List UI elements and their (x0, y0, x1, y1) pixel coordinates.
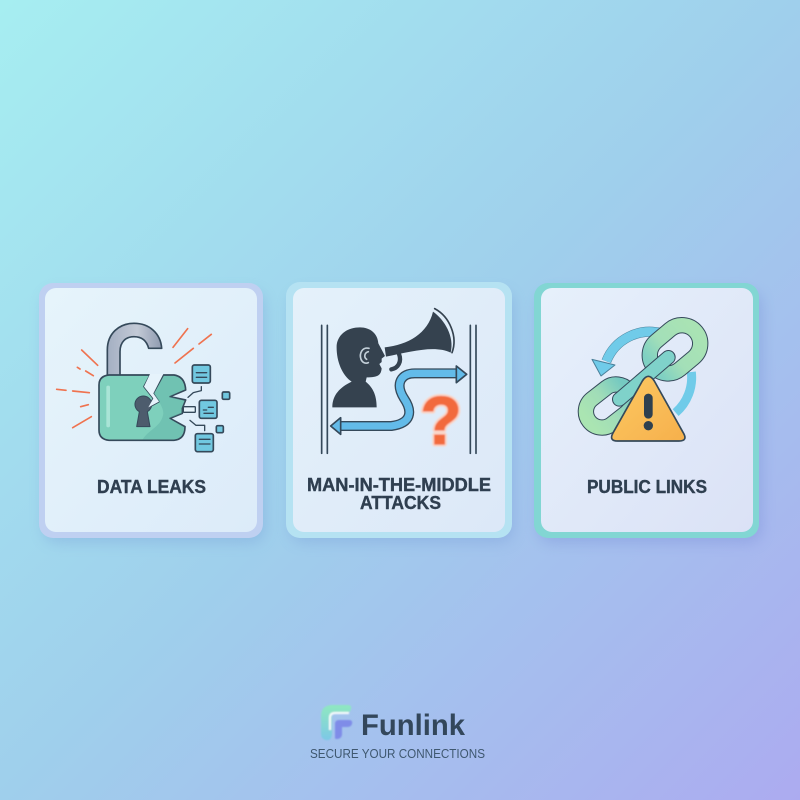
data fragment (183, 407, 195, 412)
panel: public links (534, 283, 762, 543)
rays (57, 329, 211, 428)
head silhouette (332, 327, 385, 407)
heading: man-in-the-middle attacks: MAN-IN-THE-MIDDLE (307, 475, 491, 495)
icon: eavesdropper with megaphone (322, 309, 476, 453)
bottom link (579, 378, 639, 434)
warning triangle (612, 376, 685, 441)
megaphone (385, 312, 452, 357)
body shading (143, 376, 185, 439)
arrow head left (331, 418, 341, 434)
ear (360, 348, 369, 363)
heading: public links: PUBLIC LINKS (587, 477, 707, 497)
icon: funlink F mark (321, 705, 352, 740)
data squares (192, 365, 230, 452)
icon: question mark: ? (420, 383, 462, 459)
connector lines (188, 373, 213, 444)
megaphone handle (391, 354, 400, 369)
icon: broken padlock (57, 323, 230, 452)
arrow outline (340, 373, 458, 426)
arrow fill (340, 373, 459, 426)
circular arrow (592, 332, 692, 413)
padlock shackle (107, 323, 162, 376)
heading: man-in-the-middle attacks: ATTACKS (360, 493, 441, 513)
body highlight (106, 386, 110, 427)
megaphone rim (435, 309, 454, 353)
boundary lines (322, 325, 476, 453)
panel: data leaks (39, 283, 265, 543)
heading: man-in-the-middle attacks (307, 475, 491, 513)
crack (144, 374, 163, 407)
wordmark: Funlink (361, 709, 465, 742)
top link (642, 318, 708, 381)
icon: question mark: ? (420, 383, 462, 459)
brand logo (310, 705, 485, 761)
panel: man-in-the-middle attacks (286, 282, 514, 543)
tagline: SECURE YOUR CONNECTIONS (310, 746, 485, 761)
middle link (619, 357, 668, 399)
keyhole (135, 396, 152, 427)
exclamation mark (644, 394, 653, 430)
heading: data leaks: DATA LEAKS (97, 477, 206, 497)
padlock body (99, 375, 186, 440)
arrow head right (456, 366, 467, 383)
icon: chain link with warning (579, 318, 708, 441)
